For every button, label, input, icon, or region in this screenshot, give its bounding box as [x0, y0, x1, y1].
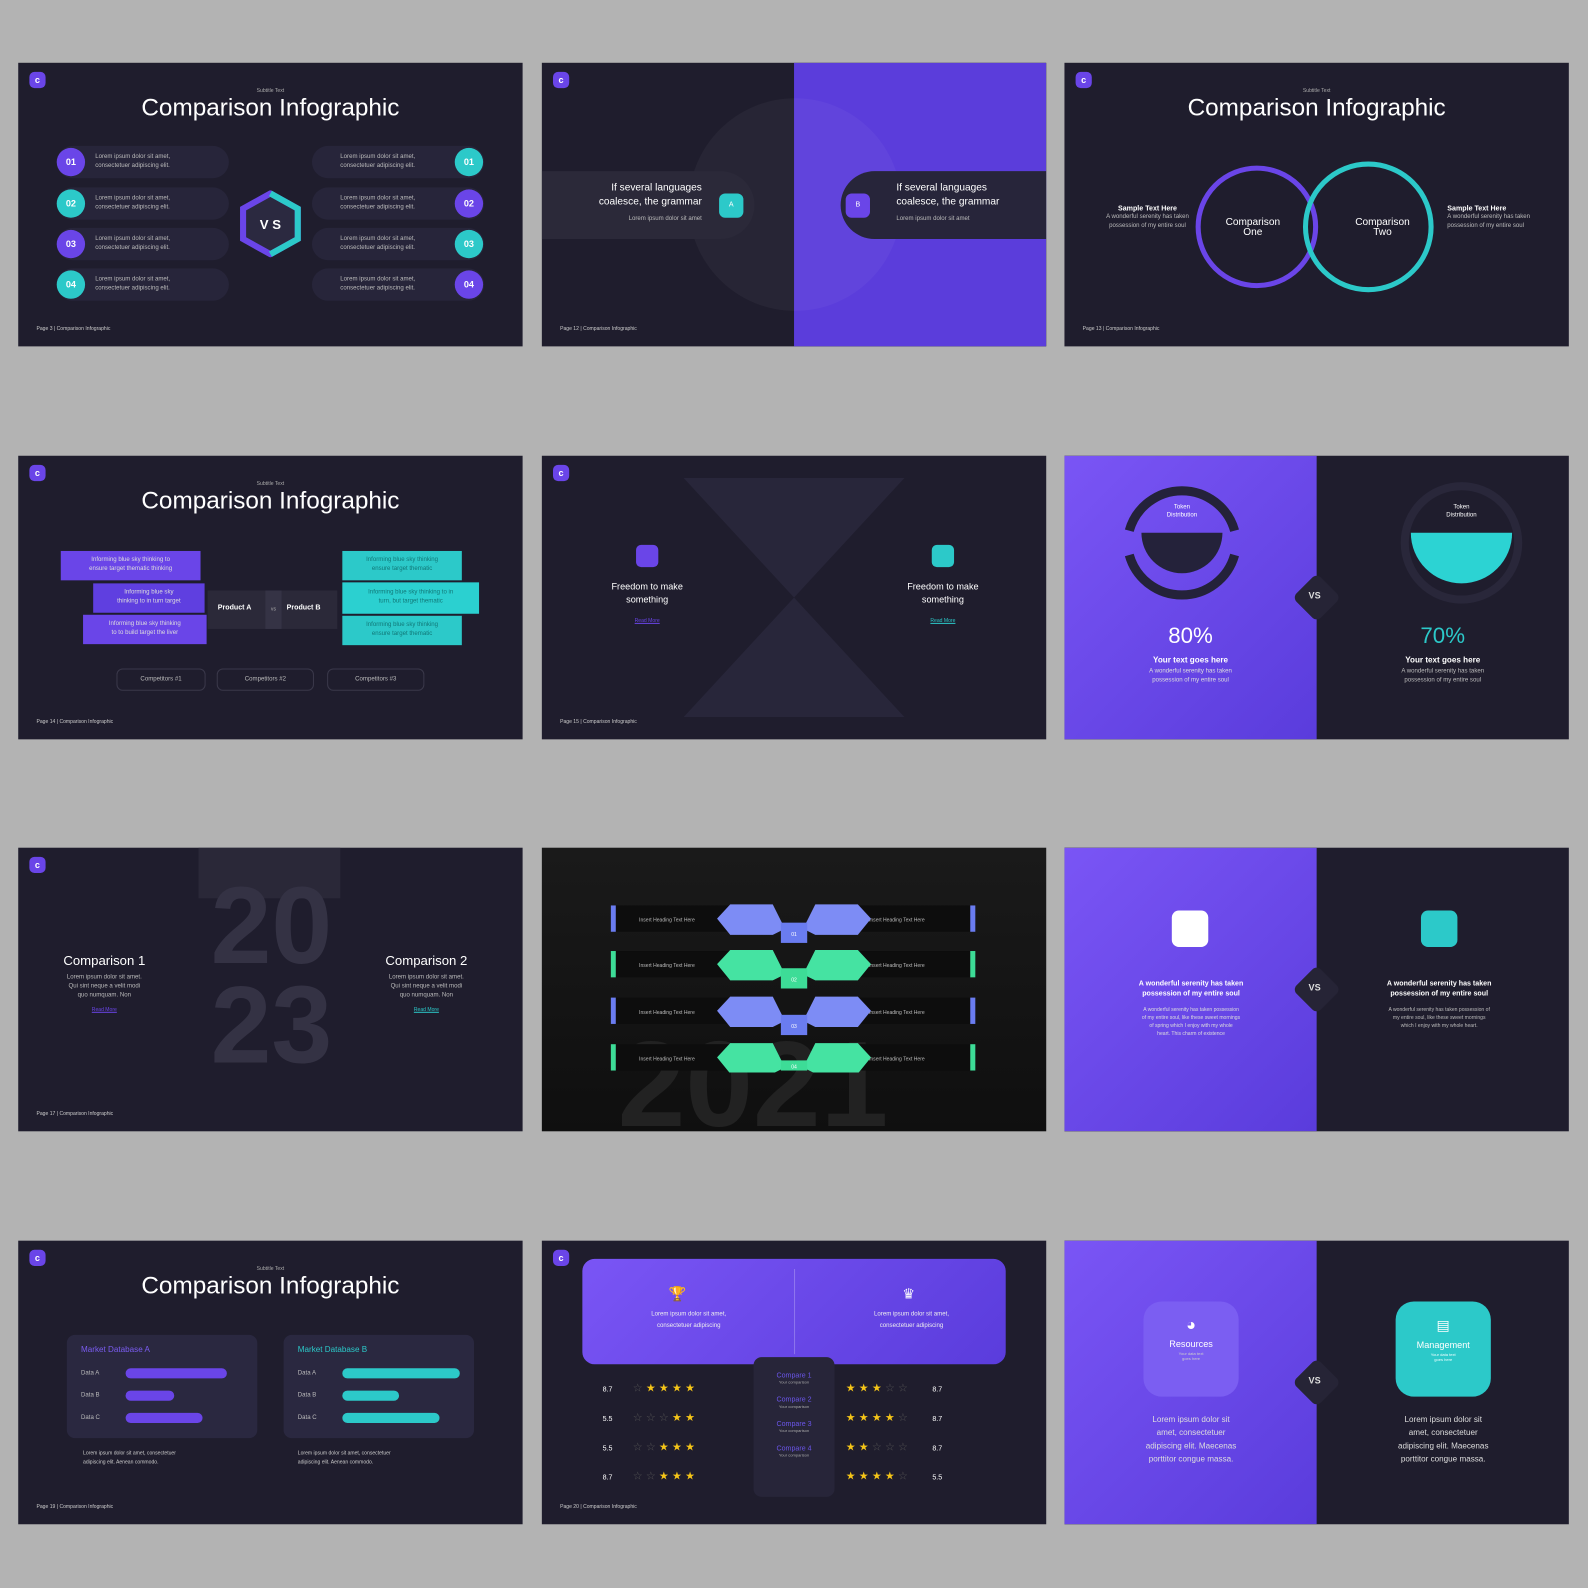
ratings rows: ★ ★ ★ ★ ☆ 5.5	[846, 1471, 942, 1483]
logo	[29, 465, 46, 481]
banner: Lorem ipsum dolor sit amet,	[651, 1312, 726, 1318]
subtitle: Subtitle Text	[257, 88, 284, 94]
left list: Lorem ipsum dolor sit amet,	[95, 276, 170, 283]
comparison 1: Comparison 1	[63, 953, 145, 968]
management text: porttitor congue massa.	[1401, 1454, 1486, 1463]
slide 5: hourglass	[542, 456, 1046, 739]
slide 3: venn	[1064, 63, 1569, 346]
vs diamond	[1294, 968, 1338, 1012]
right list: consectetuer adipiscing elit.	[340, 286, 415, 292]
left list: consectetuer adipiscing elit.	[95, 205, 170, 211]
big year: 20	[211, 864, 332, 986]
venn circles: Comparison	[1355, 217, 1410, 228]
resources text: adipiscing elit. Maecenas	[1146, 1441, 1236, 1450]
left list: 01	[66, 157, 76, 167]
resources text	[1146, 1415, 1236, 1463]
purple blocks: thinking to in turn target	[117, 599, 181, 605]
right circle chart: Token	[1453, 504, 1470, 510]
title: Comparison Infographic	[141, 487, 399, 515]
logo	[553, 465, 569, 481]
left text: A wonderful serenity has taken possession of my entire soul	[1106, 214, 1189, 229]
left text: A wonderful serenity has taken	[1139, 980, 1243, 987]
right list: 01	[464, 157, 474, 167]
product band: vs	[271, 607, 276, 613]
card A: Market Database A	[81, 1345, 150, 1354]
left list: Lorem ipsum dolor sit amet,	[95, 195, 170, 202]
right statement: If several languages	[896, 182, 987, 193]
management text: adipiscing elit. Maecenas	[1398, 1441, 1488, 1450]
big year	[211, 864, 332, 1086]
card A: Data A	[81, 1370, 99, 1376]
right text: A wonderful serenity has taken	[1387, 980, 1491, 987]
purple half	[1064, 848, 1317, 1131]
left list: 04	[66, 280, 76, 290]
card A: Data C	[81, 1415, 100, 1421]
footer: Page 15 | Comparison Infographic	[560, 719, 637, 725]
right circle chart	[1401, 482, 1522, 604]
left list: consectetuer adipiscing elit.	[95, 163, 170, 169]
slide 11: star ratings	[542, 1241, 1046, 1524]
right text: which I enjoy with my whole heart.	[1401, 1023, 1478, 1029]
big year: 23	[211, 963, 332, 1086]
icon trophy: 🏆	[668, 1285, 686, 1301]
right item: Freedom to make	[907, 581, 979, 591]
product band: Product B	[287, 605, 321, 612]
slide 1: comparison list	[18, 63, 523, 346]
slide 2: split statements	[542, 63, 1046, 346]
slide 7: 2023	[18, 848, 523, 1131]
logo: c	[35, 75, 40, 85]
right text: possession of my entire soul	[1390, 991, 1488, 998]
left list: consectetuer adipiscing elit.	[95, 286, 170, 292]
subtitle: Subtitle Text	[1303, 88, 1330, 94]
management text: Lorem ipsum dolor sit	[1405, 1415, 1482, 1424]
70%	[1401, 623, 1484, 684]
left list: Lorem ipsum dolor sit amet,	[95, 154, 170, 160]
right list: Lorem ipsum dolor sit amet,	[340, 195, 415, 202]
slide 4: product blocks	[18, 456, 523, 739]
slide 12: resources vs management	[1064, 1241, 1569, 1524]
cyan blocks: ensure target thematic	[372, 566, 432, 572]
comparison 2: Read More	[414, 1007, 439, 1013]
right list: 02	[464, 199, 474, 209]
footer: Page 12 | Comparison Infographic	[560, 326, 637, 332]
left statement: Lorem ipsum dolor sit amet	[629, 216, 702, 222]
right list: consectetuer adipiscing elit.	[340, 163, 415, 169]
ratings rows: ★ ★ ★ ★ ☆ 8.7	[846, 1412, 942, 1424]
cyan blocks: turn, but target thematic	[379, 599, 443, 605]
management card: Management	[1417, 1340, 1470, 1350]
resources text: amet, consectetuer	[1157, 1428, 1226, 1437]
logo	[29, 857, 46, 873]
logo: c	[1081, 75, 1086, 85]
right text: A wonderful serenity has taken possession of my entire soul	[1447, 214, 1530, 229]
ratings rows: 5.5 ☆ ☆ ★ ★ ★	[603, 1441, 695, 1453]
logo	[553, 1250, 569, 1266]
resources card: goes here	[1182, 1356, 1200, 1361]
right text: A wonderful serenity has taken possession of	[1389, 1007, 1490, 1013]
ribbon diagram	[610, 904, 976, 1072]
icon	[636, 545, 658, 567]
cyan blocks: Informing blue sky thinking	[366, 557, 438, 563]
card B	[284, 1335, 474, 1438]
right text	[1447, 205, 1530, 229]
right list	[312, 146, 484, 300]
right list: 03	[464, 239, 474, 249]
right list: Lorem ipsum dolor sit amet,	[340, 276, 415, 283]
footer: Page 13 | Comparison Infographic	[1083, 326, 1159, 332]
purple blocks: Informing blue sky thinking to	[91, 557, 170, 563]
purple blocks: Informing blue sky	[124, 589, 174, 596]
center column: Compare 3	[776, 1421, 812, 1428]
icon B	[846, 193, 870, 218]
competitor pills	[116, 668, 424, 691]
ribbon diagram: 02	[791, 977, 797, 983]
cyan blocks: Informing blue sky thinking	[366, 622, 438, 628]
80%: A wonderful serenity has taken	[1149, 668, 1232, 675]
comparison 1: Qui sint neque a velit modi	[69, 983, 140, 990]
left text: of my entire soul, like these sweet mornings	[1142, 1015, 1240, 1021]
column bg	[199, 848, 340, 898]
right list: 04	[464, 280, 474, 290]
footer: Page 20 | Comparison Infographic	[560, 1504, 637, 1510]
purple blocks: ensure target thematic thinking	[89, 566, 172, 572]
ratings rows: ★ ★ ★ ☆ ☆ 8.7	[846, 1382, 942, 1395]
title: Comparison Infographic	[1188, 94, 1446, 122]
resources card	[1143, 1301, 1239, 1397]
card A: Data B	[81, 1393, 100, 1399]
slide 8: 2021 ribbons	[542, 848, 1046, 1131]
title: Comparison Infographic	[141, 1272, 399, 1299]
purple blocks: Informing blue sky thinking	[109, 621, 181, 627]
icon B: B	[855, 202, 860, 209]
center column: Your comparison	[779, 1379, 809, 1384]
logo	[29, 72, 46, 88]
logo: c	[35, 860, 40, 870]
right statement	[841, 171, 1046, 239]
left text	[1139, 980, 1243, 1037]
captions: adipiscing elit. Aenean commodo.	[83, 1459, 159, 1466]
captions	[83, 1450, 176, 1466]
right text: my entire soul, like these sweet mornings	[1393, 1015, 1485, 1021]
center column: Compare 4	[776, 1445, 812, 1452]
management card: ▤	[1437, 1317, 1450, 1333]
right item	[907, 544, 979, 624]
venn circles: One	[1243, 227, 1263, 238]
right text	[1387, 980, 1492, 1029]
center column	[754, 1357, 835, 1497]
resources card: ◕	[1186, 1317, 1196, 1334]
hourglass shape	[684, 478, 904, 717]
comparison 2	[385, 953, 467, 1013]
banner: consectetuer adipiscing	[880, 1323, 943, 1329]
ribbon diagram: Insert Heading Text Here	[869, 963, 925, 969]
card B: Market Database B	[298, 1345, 367, 1354]
ribbon diagram: Insert Heading Text Here	[639, 1056, 695, 1062]
ratings rows: 8.7 ☆ ☆ ★ ★ ★	[603, 1471, 695, 1483]
icon A: A	[729, 202, 734, 209]
left list: consectetuer adipiscing elit.	[95, 245, 170, 251]
comparison 2: quo numquam. Non	[400, 993, 453, 999]
slide 10: market database: Lorem ipsum dolor sit amet, consectetuer	[298, 1450, 391, 1456]
banner: Lorem ipsum dolor sit amet,	[874, 1312, 949, 1318]
title: Comparison Infographic	[141, 94, 399, 122]
right statement: coalesce, the grammar	[896, 196, 999, 208]
left text: Sample Text Here	[1118, 206, 1177, 213]
comparison 1: Read More	[92, 1007, 117, 1013]
purple blocks	[60, 550, 207, 644]
70%: possession of my entire soul	[1404, 678, 1481, 684]
left item: Freedom to make	[611, 581, 683, 591]
card B: Data A	[298, 1370, 316, 1376]
80%: possession of my entire soul	[1152, 678, 1229, 684]
ribbon diagram: 01	[791, 932, 797, 938]
left list: 02	[66, 199, 76, 209]
product band	[208, 590, 337, 629]
right list: Lorem ipsum dolor sit amet,	[340, 154, 415, 160]
resources card: Your data text	[1179, 1351, 1203, 1356]
left circle chart: Token	[1174, 504, 1190, 510]
subtitle: Subtitle Text	[257, 481, 284, 487]
left text	[1106, 205, 1189, 229]
left circle chart	[1124, 486, 1239, 600]
logo: c	[559, 468, 564, 478]
subtitle: Subtitle Text	[257, 1266, 284, 1272]
competitor pills: Competitors #3	[355, 677, 396, 683]
center column: Your comparison	[779, 1428, 809, 1433]
slide 10: market database	[18, 1241, 523, 1524]
ribbon diagram: Insert Heading Text Here	[639, 1010, 695, 1016]
cyan blocks: ensure target thematic	[372, 631, 432, 637]
comparison 2: Lorem ipsum dolor sit amet.	[389, 974, 464, 980]
comparison 1: quo numquam. Non	[78, 993, 131, 999]
card B: Data B	[298, 1393, 316, 1399]
80%	[1149, 623, 1232, 684]
banner	[582, 1259, 1006, 1364]
right icon	[1421, 911, 1457, 947]
VS hexagon	[240, 190, 301, 258]
product band: Product A	[218, 605, 251, 612]
ribbon diagram: Insert Heading Text Here	[869, 1010, 925, 1016]
slide 9: serenity compare	[1064, 848, 1569, 1131]
slide 10: market database: adipiscing elit. Aenean commodo.	[298, 1459, 373, 1466]
left item: something	[626, 595, 668, 605]
vs diamond: VS	[1309, 590, 1321, 601]
footer: Page 3 | Comparison Infographic	[36, 326, 110, 332]
captions: Lorem ipsum dolor sit amet, consectetuer	[83, 1450, 176, 1456]
center column: Compare 2	[776, 1397, 812, 1404]
comparison 2: Comparison 2	[385, 953, 467, 968]
left text: A wonderful serenity has taken possession	[1143, 1007, 1239, 1013]
competitor pills: Competitors #1	[140, 677, 182, 683]
logo	[29, 1250, 46, 1266]
70%: A wonderful serenity has taken	[1401, 668, 1484, 675]
resources card: Resources	[1169, 1339, 1213, 1349]
80%: Your text goes here	[1153, 655, 1228, 664]
VS hexagon: V S	[260, 217, 281, 232]
footer: Page 14 | Comparison Infographic	[36, 719, 113, 725]
ribbon diagram: 03	[791, 1024, 797, 1030]
ratings rows: 8.7 ☆ ★ ★ ★ ★	[603, 1382, 695, 1395]
ribbon diagram: Insert Heading Text Here	[869, 1056, 925, 1062]
center column: Your comparison	[779, 1452, 809, 1457]
card B: Data C	[298, 1415, 317, 1421]
logo: c	[35, 1253, 40, 1263]
left list	[56, 146, 229, 300]
banner: consectetuer adipiscing	[657, 1323, 720, 1329]
ribbon diagram: Insert Heading Text Here	[639, 918, 695, 924]
resources text: porttitor congue massa.	[1149, 1454, 1233, 1463]
ribbon diagram: Insert Heading Text Here	[869, 918, 925, 924]
management card: goes here	[1434, 1357, 1452, 1362]
80%: 80%	[1168, 623, 1213, 648]
cyan blocks	[342, 550, 480, 646]
left statement: If several languages	[611, 182, 702, 193]
ribbon diagram: 04	[791, 1065, 797, 1071]
logo: c	[559, 1253, 564, 1263]
management text	[1398, 1415, 1488, 1463]
left text: heart. This charm of existence	[1157, 1031, 1225, 1037]
left icon	[1172, 911, 1208, 947]
right text: Sample Text Here	[1447, 206, 1506, 213]
left circle chart: Distribution	[1167, 513, 1197, 519]
purple half	[794, 63, 1046, 346]
vs diamond: VS	[1309, 982, 1321, 993]
right list: consectetuer adipiscing elit.	[340, 245, 415, 251]
decorative shape	[689, 98, 901, 311]
comparison 1	[63, 953, 145, 1013]
left text: of spring which I enjoy with my whole	[1149, 1023, 1233, 1029]
icon crown: ♛	[902, 1285, 915, 1301]
ratings rows	[602, 1382, 942, 1483]
ratings rows: ★ ★ ☆ ☆ ☆ 8.7	[846, 1441, 942, 1453]
right item: something	[922, 595, 964, 605]
left item: Read More	[635, 618, 660, 624]
70%: 70%	[1420, 623, 1465, 648]
logo	[553, 72, 569, 88]
left item	[611, 544, 683, 624]
ribbon diagram: Insert Heading Text Here	[639, 963, 695, 969]
logo: c	[35, 468, 40, 478]
venn circles	[1196, 162, 1434, 292]
left statement: coalesce, the grammar	[599, 196, 702, 208]
left list: Lorem ipsum dolor sit amet,	[95, 236, 170, 242]
vs diamond: VS	[1309, 1375, 1321, 1386]
center column: Compare 1	[776, 1372, 812, 1379]
icon A	[719, 193, 743, 218]
management text: amet, consectetuer	[1409, 1428, 1478, 1437]
ratings rows: 5.5 ☆ ☆ ☆ ★ ★	[603, 1412, 695, 1424]
left statement	[542, 171, 755, 239]
right list: Lorem ipsum dolor sit amet,	[340, 236, 415, 242]
purple blocks: to to build target the liver	[112, 630, 178, 636]
70%: Your text goes here	[1405, 655, 1480, 664]
footer: Page 19 | Comparison Infographic	[36, 1504, 113, 1510]
comparison 2: Qui sint neque a velit modi	[391, 983, 462, 990]
icon	[932, 545, 954, 567]
right list: consectetuer adipiscing elit.	[340, 205, 415, 211]
competitor pills: Competitors #2	[245, 677, 286, 683]
right item: Read More	[930, 618, 955, 624]
comparison 1: Lorem ipsum dolor sit amet.	[67, 974, 142, 980]
purple half	[1064, 1241, 1317, 1524]
right circle chart: Distribution	[1446, 513, 1477, 519]
vs diamond	[1294, 576, 1338, 620]
cyan blocks: Informing blue sky thinking to in	[368, 589, 453, 596]
card A	[67, 1335, 257, 1438]
slide 6: token distribution	[1064, 456, 1569, 739]
logo	[1076, 72, 1092, 88]
center column: Your comparison	[779, 1404, 809, 1409]
purple half	[1064, 456, 1317, 739]
venn circles: Two	[1373, 227, 1392, 238]
right statement: Lorem ipsum dolor sit amet	[896, 216, 970, 222]
footer: Page 17 | Comparison Infographic	[36, 1111, 113, 1117]
logo: c	[559, 75, 564, 85]
venn circles: Comparison	[1226, 217, 1280, 228]
management card	[1396, 1301, 1491, 1397]
resources text: Lorem ipsum dolor sit	[1152, 1415, 1230, 1424]
left list: 03	[66, 239, 76, 249]
management card: Your data text	[1431, 1352, 1456, 1357]
vs diamond	[1294, 1360, 1338, 1404]
left text: possession of my entire soul	[1142, 991, 1240, 998]
